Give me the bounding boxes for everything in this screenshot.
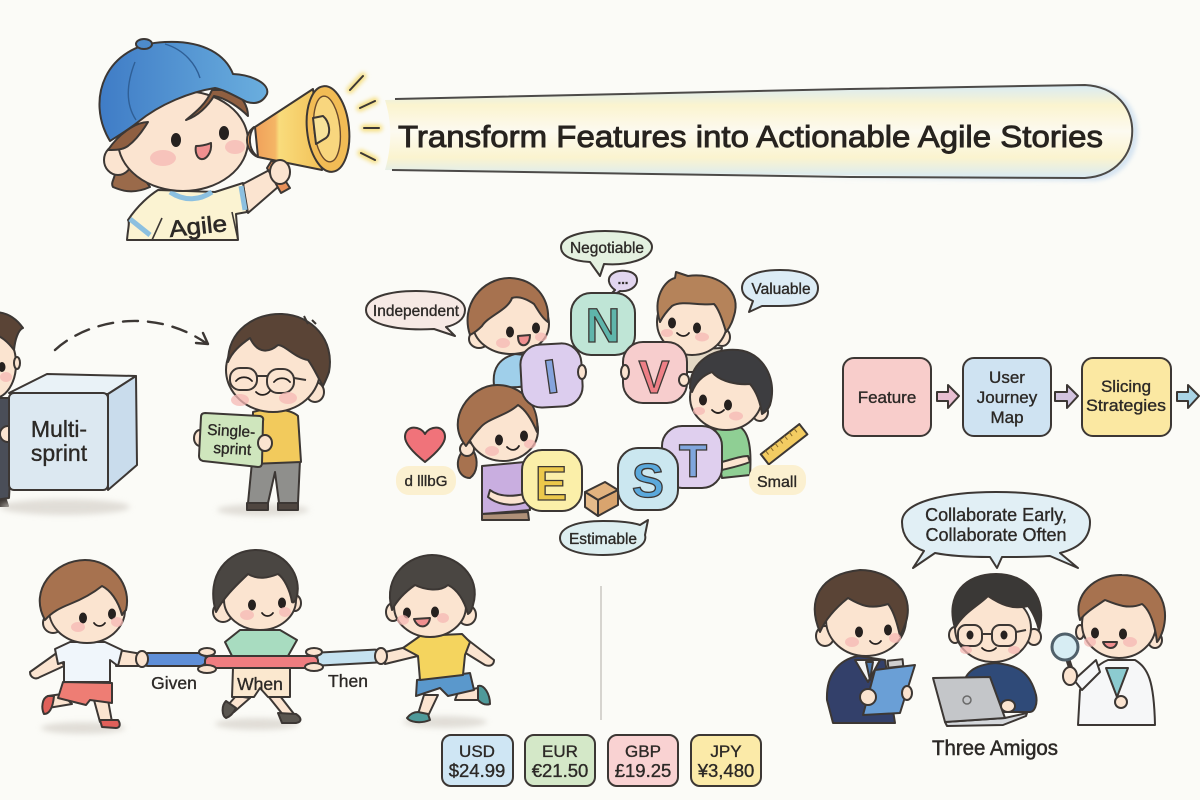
INVEST circle [366,231,818,555]
heart icon [405,428,445,462]
kid three [385,555,494,728]
arrow [1177,385,1199,408]
mascot face [118,91,248,191]
mascot mouth [196,143,211,159]
tile V [621,342,689,403]
ellipsis bubble: ... [618,272,628,287]
cap button [136,39,152,49]
EUR card: EUR [542,742,578,761]
speech bubble: Collaborate Early, [925,505,1067,525]
GBP card: GBP [625,742,661,761]
dashed arrow [55,321,208,350]
multi-sprint box: Multi- [31,416,87,442]
estimable bubble [560,520,648,555]
tile N [571,293,635,355]
three amigos label: Three Amigos [932,737,1058,760]
JPY card: ¥3,480 [697,760,754,781]
mascot shirt [127,166,286,240]
mascot eyes [171,126,229,147]
given when then scene [30,550,494,734]
user journey map box: Map [990,408,1024,427]
ellipsis bubble [609,271,637,296]
banner ribbon [385,85,1134,178]
USD card: $24.99 [449,760,505,781]
currency cards [442,735,761,786]
speech bubble: Collaborate Often [925,525,1067,545]
small label [749,465,806,495]
user journey map box: Journey [977,388,1038,407]
multi-sprint box [9,374,137,490]
mascot hair [108,90,248,150]
vertical divider [600,586,602,720]
single-sprint card: sprint [213,440,252,459]
mascot ear [104,145,132,175]
valuable bubble [742,270,818,312]
partial person [0,312,23,506]
mascot hair back [112,165,150,191]
GBP card [608,735,678,786]
garbled label: d lllbG [404,473,448,490]
slicing strategies box: Strategies [1086,396,1166,415]
banner glow [800,86,1138,181]
user journey map box: User [989,368,1025,387]
shirt label: Agile [168,210,228,242]
negotiable bubble [561,231,652,276]
mascot cheeks [150,140,245,166]
ruler icon [761,424,807,465]
arrow [1055,385,1078,408]
tile S: S [632,455,664,508]
estimable bubble: Estimable [569,531,637,548]
multi-sprint box: sprint [31,440,88,466]
kid behind I tile [468,278,549,387]
JPY card: JPY [710,742,742,761]
arrow [937,385,959,408]
person with clipboard [815,570,915,723]
JPY card [691,735,761,786]
tile T [662,426,722,488]
small label: Small [757,474,797,491]
person with laptop [933,574,1041,726]
sound rays [350,76,379,160]
tile I [519,342,586,409]
girl behind E tile [458,385,538,520]
independent bubble [366,291,465,336]
multi-sprint to single-sprint scene [0,312,330,516]
person with magnifier [1052,575,1165,725]
title: Transform Features into Actionable Agile Stories [398,119,1103,154]
process flow [843,358,1199,436]
kid behind T tile [690,350,772,478]
glasses kid [217,314,330,516]
tile N: N [586,300,620,353]
feature box [843,358,931,436]
tile T: T [679,435,707,487]
connecting bands [136,648,387,673]
then label: Then [328,671,368,691]
tile E [522,450,582,511]
kid two [213,550,301,730]
parcel icon [585,482,618,516]
user journey map box [963,358,1051,436]
single-sprint card: Single- [207,422,256,441]
slicing strategies box: Slicing [1101,377,1151,396]
tile E: E [535,458,567,511]
mascot with megaphone [99,39,379,242]
megaphone [247,84,353,193]
negotiable bubble: Negotiable [570,240,644,257]
three amigos scene [815,492,1165,760]
tile S [618,448,678,510]
valuable bubble: Valuable [751,281,811,298]
USD card: USD [459,742,495,761]
title banner [385,85,1138,181]
USD card [442,735,513,786]
EUR card: €21.50 [532,760,588,781]
when label: When [237,674,283,694]
given label: Given [151,673,197,693]
independent bubble: Independent [373,303,460,320]
EUR card [525,735,595,786]
slicing strategies box [1082,358,1171,436]
mascot cap [99,42,267,141]
speech bubble [902,492,1090,568]
tile V: V [639,351,670,403]
single-sprint card [194,413,272,467]
tile I: I [541,350,562,405]
floor shadow [0,499,130,515]
kid behind V tile [657,272,736,372]
feature box: Feature [858,388,916,407]
garbled label [396,466,456,495]
kid one [30,560,142,734]
GBP card: £19.25 [615,760,671,781]
